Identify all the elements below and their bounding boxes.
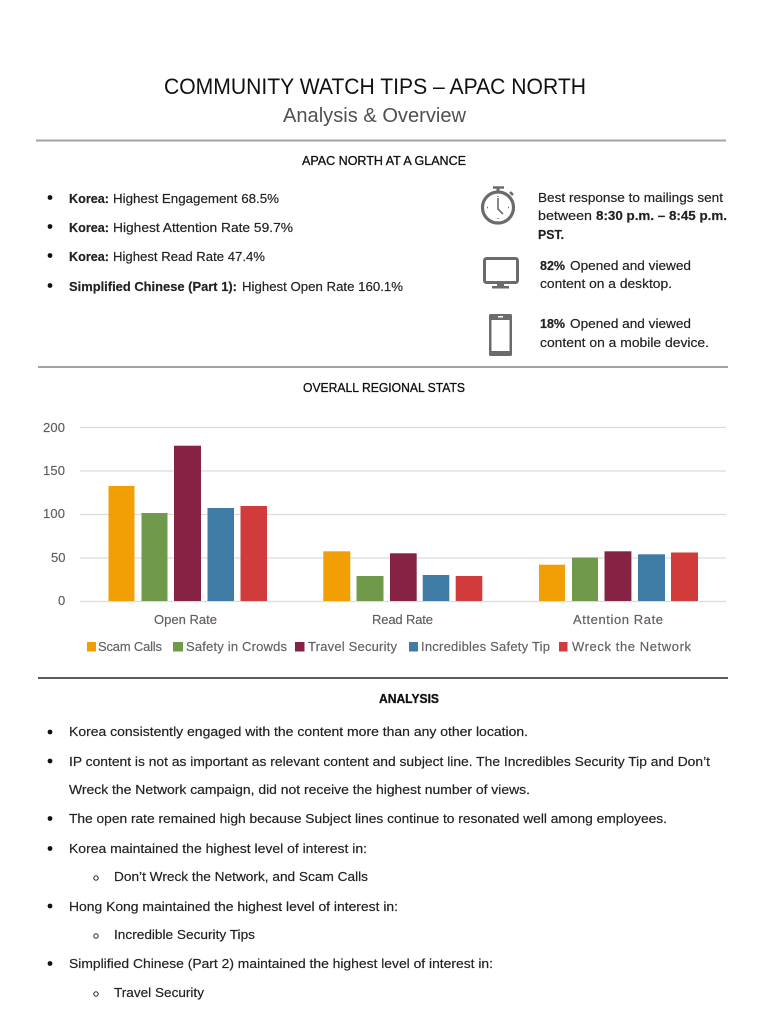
highlight: read rate: Korea: [69, 249, 109, 264]
panel: analysis [48, 691, 710, 1000]
title block [164, 74, 586, 127]
legend: Travel Security [308, 639, 398, 654]
legend: Wreck the Network [572, 639, 692, 654]
bullet: open rate: The open rate remained high because Subject lines continue to resonated well among employees. [69, 811, 667, 826]
bars: open rate [108, 446, 267, 601]
highlight: open rate [48, 279, 403, 294]
highlight: read rate [48, 249, 265, 264]
highlight: engagement: Highest Engagement 68.5% [113, 191, 279, 206]
tip: mobile share: Opened and viewed [570, 316, 691, 331]
highlight: attention rate: Korea: [69, 220, 109, 235]
bullet: IP content: Wreck the Network campaign, did not receive the highest number of views. [69, 782, 530, 797]
bullet: Simplified Chinese interest: Simplified Chinese (Part 2) maintained the highest level of interest in: [69, 956, 493, 971]
y axis labels: 50 [51, 550, 66, 565]
highlight: read rate: Highest Read Rate 47.4% [113, 249, 265, 264]
heading: at a glance: APAC NORTH AT A GLANCE [302, 153, 466, 168]
sub-bullet: Hong Kong campaign: Incredible Security Tips [114, 927, 256, 942]
tip: best response time: 8:30 p.m. – 8:45 p.m. [596, 208, 727, 223]
tip: best response time [538, 190, 727, 242]
legend: Safety in Crowds [186, 639, 288, 654]
tip: best response time: Best response to mailings sent [538, 190, 723, 205]
bullet: IP content [48, 754, 710, 797]
highlight: engagement [48, 191, 279, 206]
highlight: attention rate: Highest Attention Rate 59.7% [113, 220, 293, 235]
icon: desktop monitor [484, 258, 518, 288]
y axis labels [43, 420, 66, 608]
legend [87, 639, 692, 654]
sub-bullet: Korea campaigns: Don’t Wreck the Network, and Scam Calls [114, 869, 369, 884]
heading: analysis: ANALYSIS [379, 691, 439, 706]
panel: at a glance [48, 153, 727, 356]
y axis labels: 0 [58, 593, 65, 608]
icon: mobile phone [489, 314, 512, 356]
y axis labels: 200 [43, 420, 65, 435]
highlight: engagement: Korea: [69, 191, 109, 206]
tip: mobile share: content on a mobile device. [540, 335, 709, 350]
heading: regional stats: OVERALL REGIONAL STATS [303, 380, 465, 395]
bars: attention rate [539, 551, 698, 601]
tip: best response time: between [538, 208, 592, 223]
highlight: open rate: Simplified Chinese (Part 1): [69, 279, 237, 294]
bars: read rate [323, 551, 482, 601]
tip: mobile share: 18% [540, 316, 565, 331]
panel: overall regional stats [43, 380, 726, 654]
legend: Incredibles Safety Tip [421, 639, 550, 654]
highlight: open rate: Highest Open Rate 160.1% [242, 279, 403, 294]
tip: desktop share: Opened and viewed [570, 258, 691, 273]
bullet: IP content: IP content is not as important as relevant content and subject line. The Incredibles Security Tip and Don’t [69, 754, 710, 769]
icon: stopwatch [482, 188, 514, 223]
highlight: attention rate [48, 220, 293, 235]
legend: Scam Calls [98, 639, 162, 654]
subtitle: Analysis & Overview [283, 104, 466, 127]
tip: desktop share: 82% [540, 258, 565, 273]
tip: desktop share [540, 258, 691, 291]
title: COMMUNITY WATCH TIPS – APAC NORTH [164, 74, 586, 99]
bullet: Hong Kong interest: Hong Kong maintained the highest level of interest in: [69, 899, 398, 914]
tip: desktop share: content on a desktop. [540, 276, 672, 291]
sub-bullet: Simplified Chinese campaign: Travel Security [114, 985, 205, 1000]
tip: mobile share [540, 316, 709, 350]
analysis list [48, 724, 710, 1000]
y axis labels: 100 [43, 506, 65, 521]
bullet: Korea interest: Korea maintained the highest level of interest in: [69, 841, 367, 856]
category labels [154, 612, 663, 627]
bullet: Korea engagement: Korea consistently engaged with the content more than any other location. [69, 724, 528, 739]
highlights list [48, 191, 403, 294]
category labels: Open Rate [154, 612, 217, 627]
tip: best response time: PST. [538, 227, 564, 242]
y axis labels: 150 [43, 463, 65, 478]
bar chart [43, 420, 726, 654]
category labels: Read Rate [372, 612, 433, 627]
category labels: Attention Rate [573, 612, 663, 627]
